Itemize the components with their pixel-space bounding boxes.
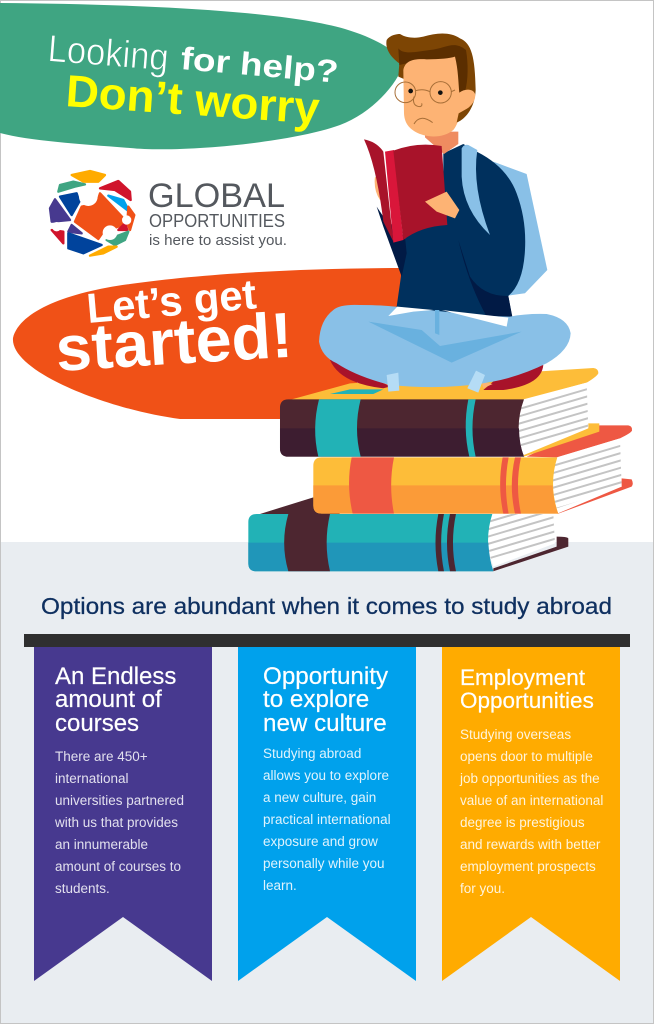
logo subword: OPPORTUNITIES	[149, 210, 285, 231]
ribbon body: opens door to multiple	[460, 749, 593, 764]
ribbon: endless courses	[34, 647, 212, 981]
ribbon body: job opportunities as the	[459, 771, 600, 786]
ribbon body: students.	[55, 881, 110, 896]
head	[386, 33, 476, 136]
ribbon body: personally while you	[263, 856, 385, 871]
crossed legs	[319, 305, 571, 387]
headline: looking for help: for help?	[179, 40, 340, 90]
book stack	[248, 368, 633, 571]
ribbon body: and rewards with better	[460, 837, 601, 852]
ribbon: employment opportunities	[442, 647, 620, 981]
ribbon body: international	[55, 771, 129, 786]
ribbon title	[263, 663, 389, 737]
ribbon body	[459, 727, 603, 896]
ribbon body	[54, 749, 184, 896]
sweater	[395, 144, 525, 318]
ribbon title: courses	[55, 710, 139, 737]
sweater shadow	[377, 207, 512, 317]
ribbon title: Employment	[460, 665, 586, 690]
ribbon body: for you.	[460, 881, 505, 896]
logo tagline: is here to assist you.	[149, 232, 287, 249]
ribbon body: universities partnered	[55, 793, 184, 808]
shoes	[330, 353, 543, 390]
ribbon body: There are 450+	[55, 749, 148, 764]
ribbon body: Studying abroad	[263, 746, 361, 761]
logo: global opportunities	[50, 171, 287, 256]
top bar	[24, 634, 630, 647]
ribbon title: amount of	[55, 686, 162, 713]
ribbon body: amount of courses to	[55, 859, 181, 874]
ribbon: explore new culture	[238, 647, 416, 981]
bottom book	[248, 497, 568, 571]
ribbon title: Opportunities	[460, 688, 594, 713]
glasses	[395, 82, 455, 124]
red book	[364, 139, 447, 243]
headline: looking for help: Looking	[46, 28, 170, 79]
logo globe	[50, 171, 134, 256]
lower background panel	[0, 542, 654, 1024]
ribbon body: a new culture, gain	[263, 790, 376, 805]
headline: let's get started: Let’s get	[85, 270, 258, 332]
middle book	[313, 425, 633, 514]
headline: let's get started: started!	[53, 299, 294, 385]
ribbon title: to explore	[263, 686, 369, 713]
green speech shape	[0, 3, 404, 149]
top book	[280, 368, 599, 457]
student character reading	[319, 33, 571, 393]
section heading: Options are abundant when it comes to study abroad	[41, 593, 612, 619]
backpack	[487, 162, 547, 297]
ribbon body: an innumerable	[55, 837, 148, 852]
trouser folds	[368, 310, 522, 363]
ribbon body: learn.	[263, 878, 297, 893]
cuffs	[387, 371, 485, 393]
neck	[425, 132, 458, 154]
ribbon body: Studying overseas	[460, 727, 571, 742]
headline: don't worry: Don’t worry	[64, 65, 321, 134]
ribbon body: value of an international	[460, 793, 603, 808]
left hand	[375, 177, 388, 205]
orange shape	[13, 268, 405, 419]
ribbon title: Opportunity	[263, 663, 389, 690]
ribbon body: employment prospects	[460, 859, 596, 874]
ribbon body	[263, 746, 391, 893]
ribbon title: new culture	[263, 710, 387, 737]
backpack strap	[462, 145, 490, 235]
right hand	[425, 192, 459, 218]
logo wordmark: GLOBAL	[148, 177, 285, 215]
ribbon body: allows you to explore	[263, 768, 389, 783]
feet	[380, 377, 493, 388]
headline: looking for help	[46, 28, 340, 90]
waist	[388, 307, 508, 327]
ribbon body: degree is prestigious	[460, 815, 585, 830]
ribbon title: An Endless	[55, 663, 176, 690]
ribbon body: practical international	[263, 812, 391, 827]
ribbon body: exposure and grow	[263, 834, 378, 849]
ribbon title	[55, 663, 176, 737]
ribbon title	[460, 665, 594, 713]
ribbon body: with us that provides	[54, 815, 178, 830]
